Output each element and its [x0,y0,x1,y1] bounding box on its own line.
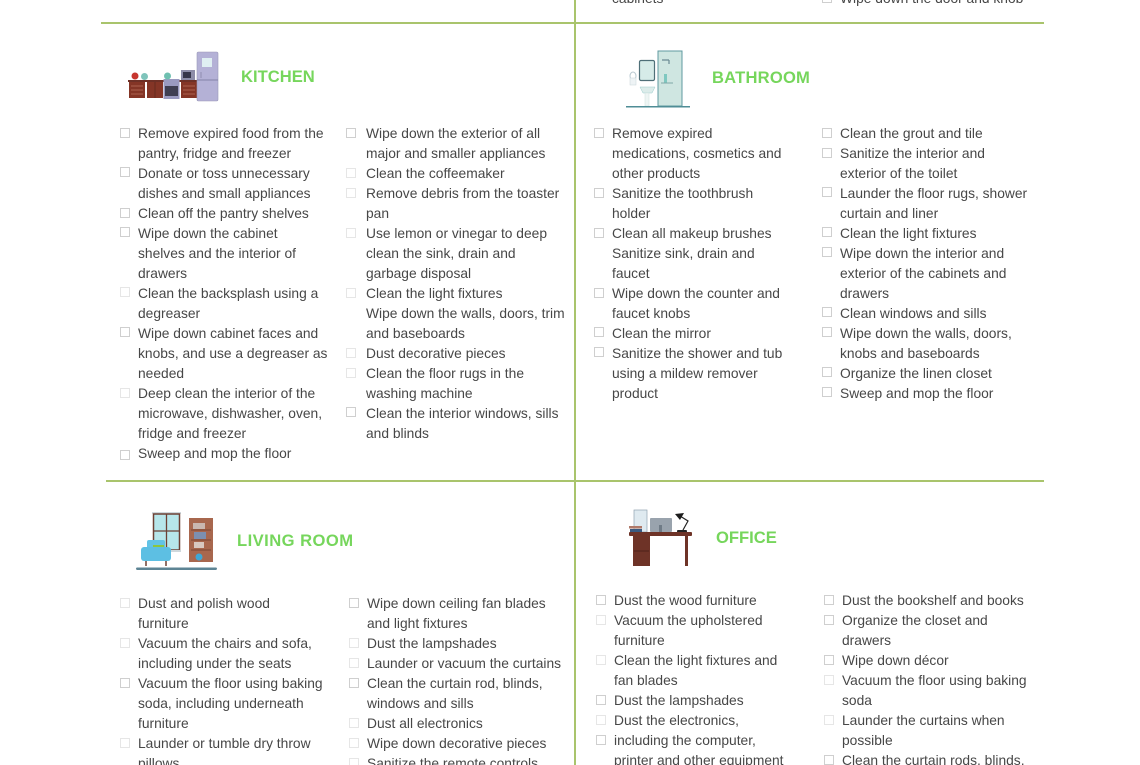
list: kitchen right: Dust decorative pieces [366,346,506,361]
list: office right: soda [842,693,872,708]
list: living room right: Dust all electronics [367,716,483,731]
list: bathroom left: holder [612,206,650,221]
list: kitchen left: fridge and freezer [138,426,246,441]
list: kitchen right: major and smaller appliances [366,146,545,161]
list: office right: Dust the bookshelf and books [842,593,1024,608]
list: bathroom left: medications, cosmetics and [612,146,781,161]
list: living room left: Vacuum the floor using baking [138,676,323,691]
list: bathroom left: Wipe down the counter and [612,286,780,301]
list: living room left: Dust and polish wood [138,596,270,611]
list: living room left: furniture [138,616,189,631]
list: bathroom left: Sanitize the shower and tub [612,346,782,361]
list: living room left: including under the seats [138,656,291,671]
list: kitchen left: degreaser [138,306,200,321]
list: bathroom left: other products [612,166,700,181]
heading: kitchen: KITCHEN [241,67,315,86]
list: kitchen right: Remove debris from the toaster [366,186,559,201]
list: living room left: furniture [138,716,189,731]
list: bathroom right: Wipe down the interior and [840,246,1004,261]
icon: bathroom [626,50,690,108]
list: office right: Vacuum the floor using baking [842,673,1027,688]
list: kitchen left: needed [138,366,184,381]
list: office left: including the computer, [614,733,756,748]
panel: office [596,510,1027,765]
panel: kitchen [120,52,565,461]
list: kitchen right: and blinds [366,426,429,441]
list: kitchen right [346,126,565,441]
list: bathroom right: Sanitize the interior and [840,146,985,161]
list: kitchen left: drawers [138,266,187,281]
heading: living room: LIVING ROOM [237,531,354,550]
list: office right: Launder the curtains when [842,713,1005,728]
list: kitchen left: Wipe down the cabinet [138,226,278,241]
list: bathroom right: exterior of the cabinets and [840,266,1006,281]
list: living room right: windows and sills [367,696,474,711]
list: bathroom right [822,126,1027,401]
list: bathroom left: faucet knobs [612,306,690,321]
list: kitchen left: shelves and the interior of [138,246,296,261]
list: office left: Dust the electronics, [614,713,739,728]
list: office left: Clean the light fixtures and [614,653,777,668]
list: kitchen left: Deep clean the interior of the [138,386,315,401]
list: kitchen right: Clean the interior windows, sills [366,406,558,421]
panel: living room [120,512,561,765]
list: kitchen right: Clean the floor rugs in the [366,366,524,381]
list: bathroom right: Clean the light fixtures [840,226,977,241]
list: kitchen right: garbage disposal [366,266,471,281]
list: office left: furniture [614,633,665,648]
list: office right: Wipe down décor [842,653,949,668]
list: living room right: Wipe down decorative pieces [367,736,546,751]
list: kitchen left: knobs, and use a degreaser as [138,346,327,361]
list: kitchen right: Wipe down the walls, doors, trim [366,306,565,321]
list: living room right [349,596,561,765]
list: living room right: Dust the lampshades [367,636,497,651]
list: living room right: Wipe down ceiling fan blades [367,596,546,611]
divider: top horizontal rule [101,22,1044,24]
list: kitchen left [120,126,327,461]
list: bathroom right: Clean the grout and tile [840,126,983,141]
list: living room right: Launder or vacuum the curtains [367,656,561,671]
list: bathroom left: Remove expired [612,126,712,141]
list: office right: drawers [842,633,891,648]
heading: bathroom: BATHROOM [712,68,810,87]
list: kitchen right: Clean the coffeemaker [366,166,505,181]
list: bathroom right: drawers [840,286,889,301]
icon: office [629,510,692,566]
list: kitchen left: Donate or toss unnecessary [138,166,310,181]
heading: office: OFFICE [716,528,777,547]
list: living room left: Launder or tumble dry throw [138,736,311,751]
list: kitchen left: Sweep and mop the floor [138,446,291,461]
list: office right: Organize the closet and [842,613,988,628]
list: bathroom left: Clean the mirror [612,326,711,341]
panel: bathroom [594,50,1027,401]
list: bathroom right: exterior of the toilet [840,166,957,181]
list: kitchen right: pan [366,206,389,221]
list: bathroom left: Sanitize the toothbrush [612,186,753,201]
list: living room left [120,596,323,765]
divider: middle horizontal rule [106,480,1044,482]
list: living room right: and light fixtures [367,616,467,631]
list: office left: Vacuum the upholstered [614,613,763,628]
list: bathroom right: Wipe down the walls, doors, [840,326,1012,341]
list: office left [596,593,784,765]
list: bathroom right: knobs and baseboards [840,346,980,361]
list: bathroom right: Launder the floor rugs, shower [840,186,1027,201]
icon: living room [136,512,217,570]
list: kitchen left: Clean off the pantry shelves [138,206,309,221]
list: kitchen left: Clean the backsplash using a [138,286,318,301]
list: bathroom left: Sanitize sink, drain and [612,246,755,261]
list: kitchen right: Use lemon or vinegar to deep [366,226,547,241]
list: office left: fan blades [614,673,678,688]
list: bathroom left: using a mildew remover [612,366,758,381]
list: kitchen left: dishes and small appliances [138,186,311,201]
list: bathroom right: curtain and liner [840,206,938,221]
list: bathroom left: product [612,386,658,401]
list: kitchen right: clean the sink, drain and [366,246,516,261]
list: bathroom left: faucet [612,266,650,281]
list: office left: Dust the wood furniture [614,593,757,608]
list: bathroom right: Organize the linen closet [840,366,992,381]
list: office left: Dust the lampshades [614,693,744,708]
list: kitchen right: Clean the light fixtures [366,286,503,301]
list: kitchen left: Remove expired food from the [138,126,324,141]
list: bathroom left: Clean all makeup brushes [612,226,772,241]
list: office right: possible [842,733,893,748]
list: bathroom left [594,126,782,401]
list: kitchen left: microwave, dishwasher, oven, [138,406,322,421]
list: kitchen right: washing machine [366,386,473,401]
list: kitchen left: Wipe down cabinet faces and [138,326,318,341]
list: kitchen left: pantry, fridge and freezer [138,146,291,161]
list: kitchen right: and baseboards [366,326,465,341]
divider: vertical rule [574,0,576,765]
list: bathroom right: Sweep and mop the floor [840,386,993,401]
list: bathroom right: Clean windows and sills [840,306,986,321]
icon: kitchen [128,52,218,102]
list: kitchen right: Wipe down the exterior of all [366,126,540,141]
list: living room left: soda, including underneath [138,696,304,711]
list: office right [824,593,1027,765]
list: living room right: Clean the curtain rod, blinds, [367,676,543,691]
list: living room left: Vacuum the chairs and sofa, [138,636,312,651]
